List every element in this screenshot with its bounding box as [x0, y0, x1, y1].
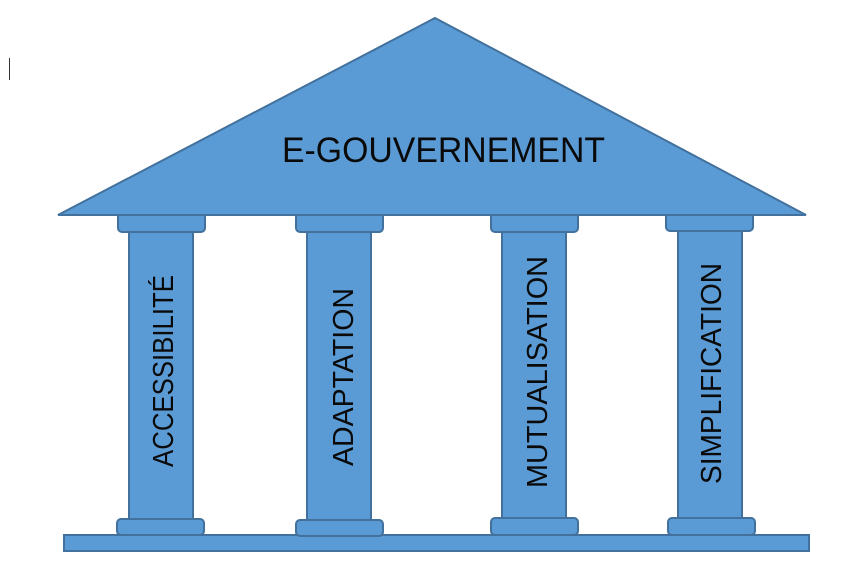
temple base	[64, 535, 809, 551]
text cursor mark	[9, 58, 10, 80]
pillar: mutualisation	[491, 212, 578, 535]
pillar: simplification	[666, 212, 755, 535]
pillar: accessibilité	[117, 212, 205, 535]
roof title: E-GOUVERNEMENT	[282, 131, 605, 170]
label: simplification: SIMPLIFICATION	[696, 263, 728, 484]
label: accessibilité: ACCESSIBILITÉ	[147, 275, 180, 467]
pillar: adaptation	[296, 212, 383, 536]
label: mutualisation: MUTUALISATION	[522, 256, 554, 488]
roof	[58, 18, 806, 215]
label: adaptation: ADAPTATION	[328, 288, 360, 466]
